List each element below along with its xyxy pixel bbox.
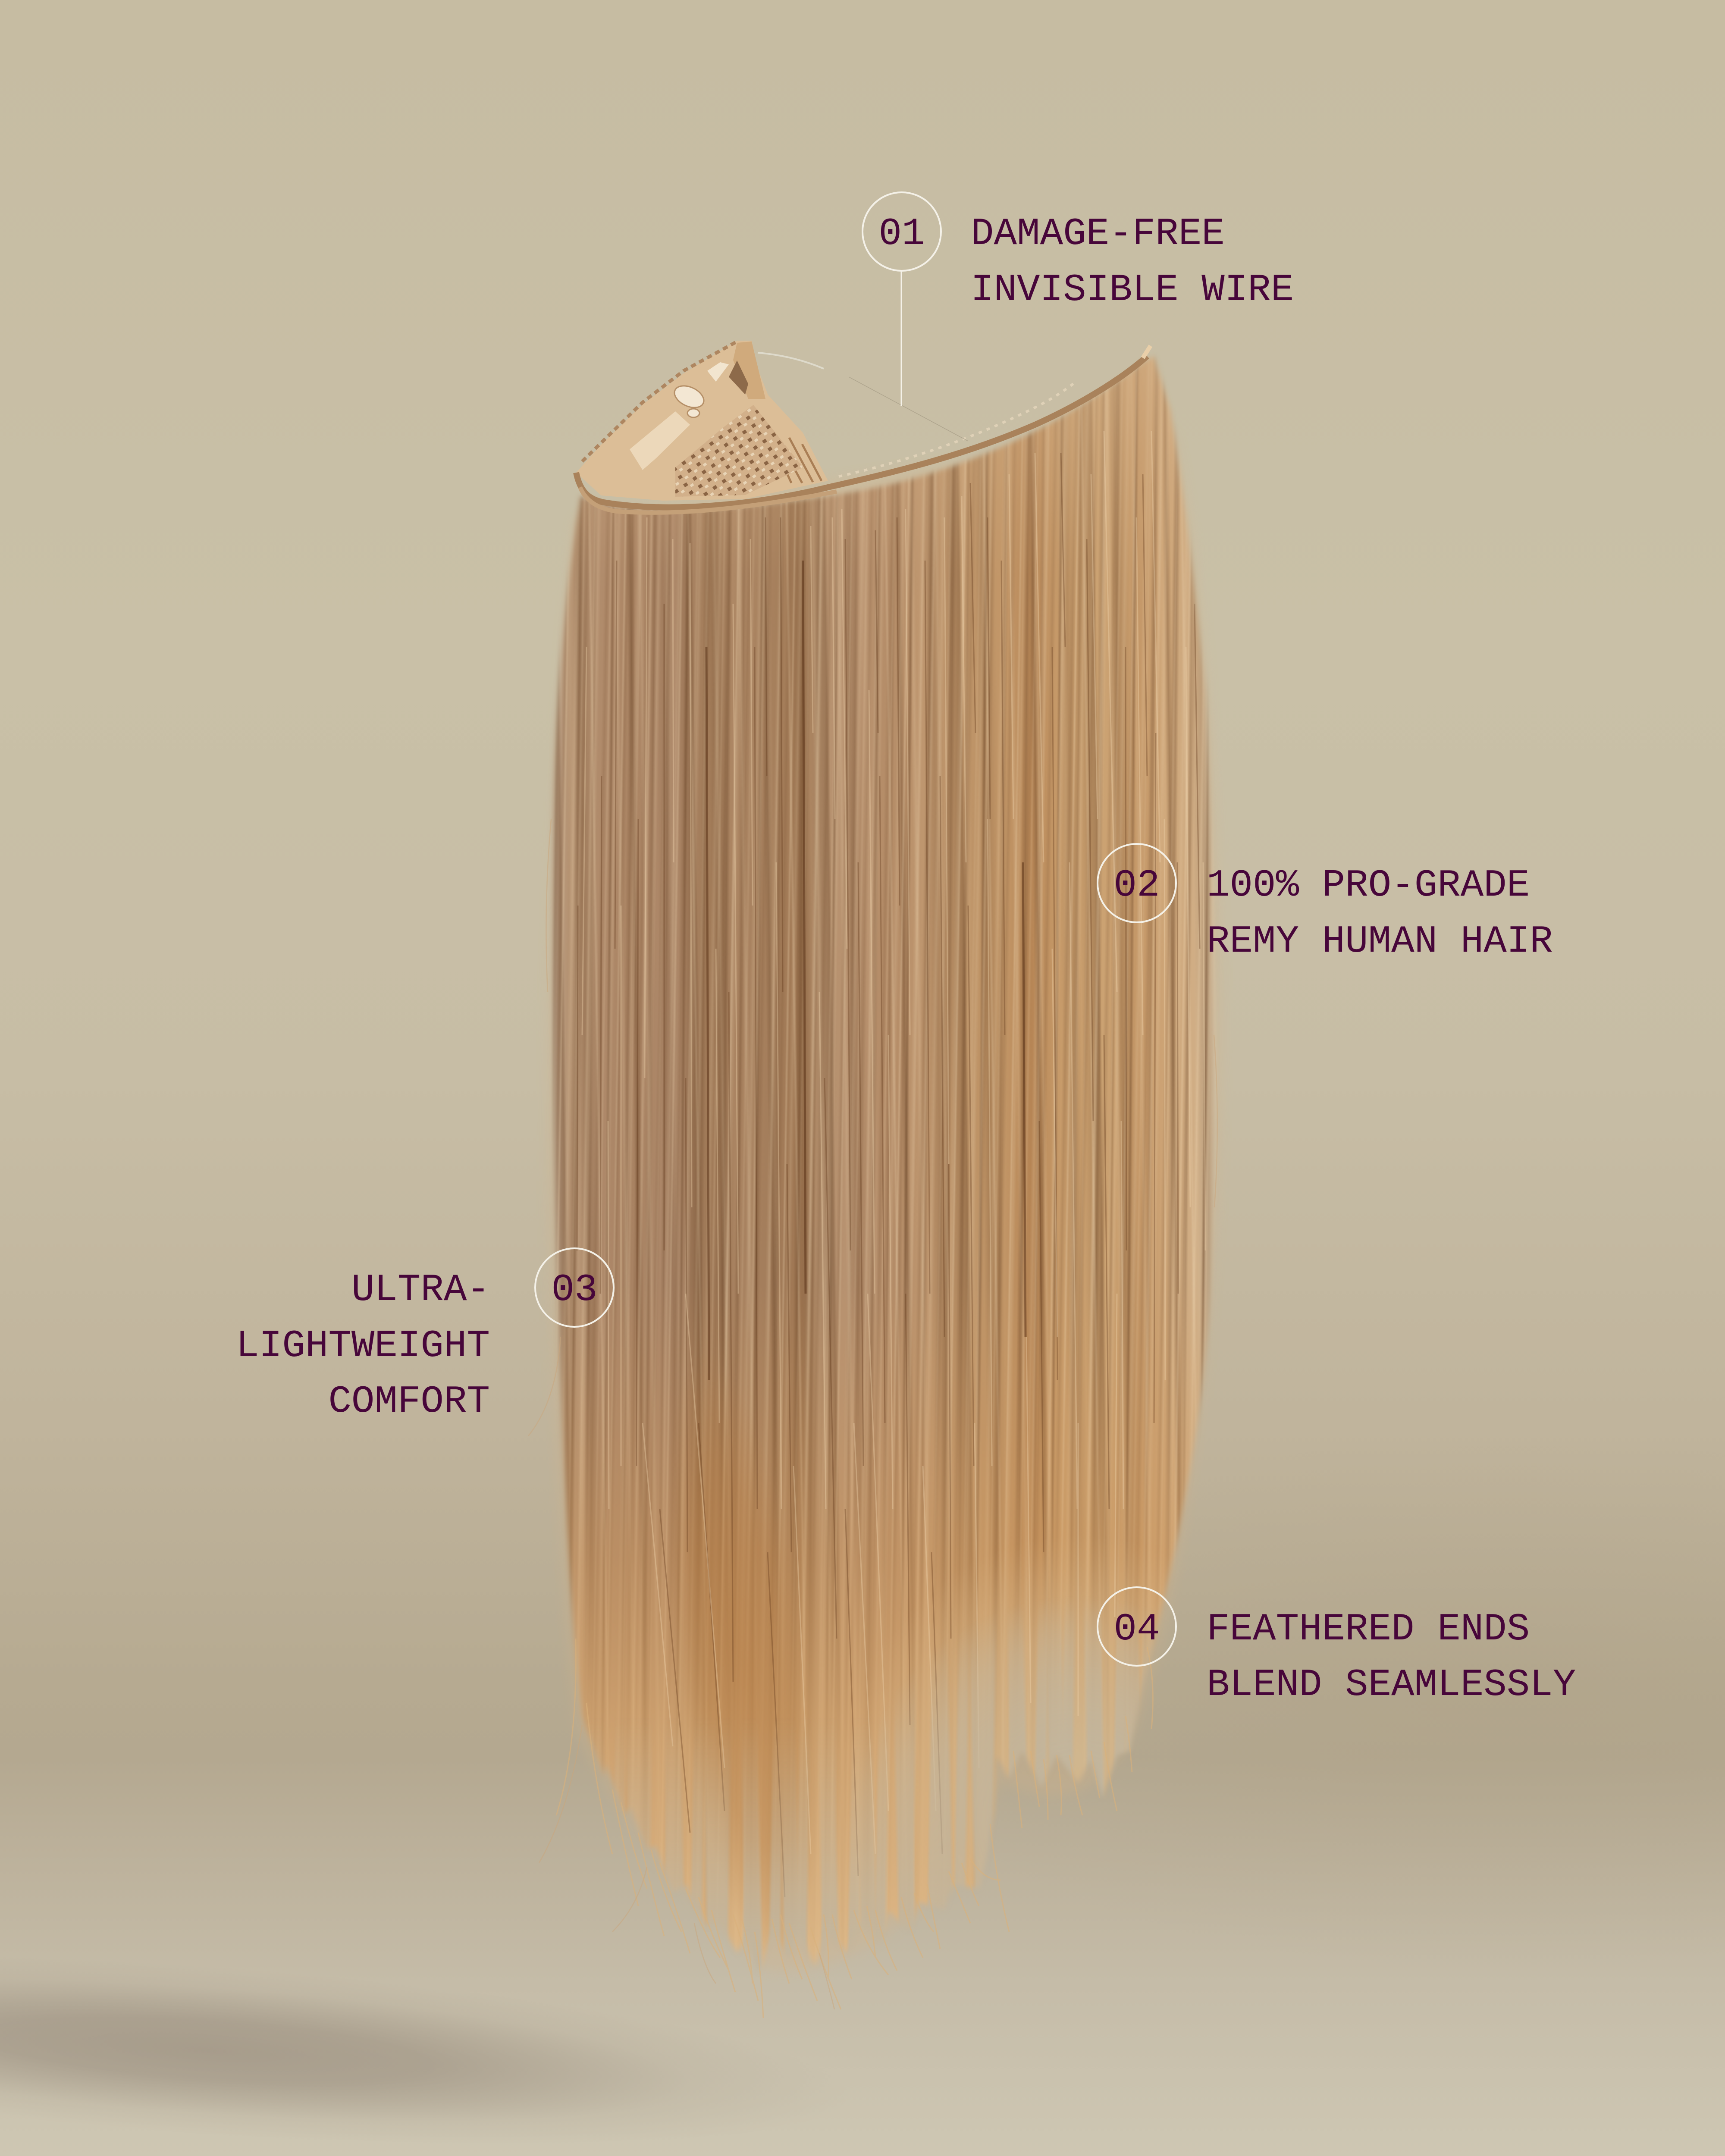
feathered hair tips	[556, 1639, 1153, 2018]
marker 02: 02	[1113, 864, 1160, 907]
dark strands	[577, 453, 1200, 1897]
hair outer feathered glow	[548, 431, 1221, 1971]
mesh lining	[675, 405, 803, 497]
hair wefts behind plate	[768, 431, 822, 483]
label 03: LIGHTWEIGHT	[236, 1324, 490, 1368]
callout 04: feathered ends blend seamlessly	[1098, 1587, 1576, 1707]
leader line	[900, 271, 902, 406]
silicone clip holes	[671, 382, 707, 417]
weft band	[576, 346, 1151, 513]
feathering to background	[539, 1509, 1229, 2001]
label 03: COMFORT	[328, 1380, 490, 1423]
marker 04	[1098, 1587, 1176, 1666]
label 01: DAMAGE-FREE	[971, 212, 1225, 256]
hair body	[550, 356, 1214, 1963]
warm ribbon near tips	[682, 1416, 800, 1921]
marker 03	[535, 1248, 614, 1327]
callout 01: damage-free invisible wire	[862, 192, 1294, 406]
callout 03: ultra-lightweight comfort	[236, 1248, 614, 1423]
label 02: 100% PRO-GRADE	[1207, 864, 1530, 907]
light strands	[582, 431, 1205, 1854]
stray hairs	[528, 819, 1217, 2009]
stitched plate edge	[582, 342, 737, 461]
metal clip	[707, 362, 729, 382]
strong dark strands	[706, 561, 1026, 1380]
marker 03: 03	[551, 1268, 598, 1312]
label 03: ULTRA-	[351, 1268, 490, 1312]
label 04: FEATHERED ENDS	[1207, 1608, 1530, 1651]
marker 02	[1098, 844, 1176, 922]
hair extension illustration	[518, 336, 1251, 2018]
callout 02: 100% pro-grade remy human hair	[1098, 844, 1553, 963]
light silicone panels	[630, 411, 690, 470]
floor shadow	[0, 1921, 858, 2156]
clip base plate	[576, 341, 828, 501]
marker 01	[862, 192, 941, 271]
fold shadow	[729, 360, 748, 395]
fold strip	[733, 342, 765, 399]
label 02: REMY HUMAN HAIR	[1207, 920, 1553, 963]
marker 01: 01	[878, 212, 925, 256]
invisible wire	[758, 353, 968, 441]
marker 04: 04	[1113, 1608, 1160, 1651]
label 04: BLEND SEAMLESSLY	[1207, 1663, 1576, 1707]
label 01: INVISIBLE WIRE	[971, 268, 1294, 312]
